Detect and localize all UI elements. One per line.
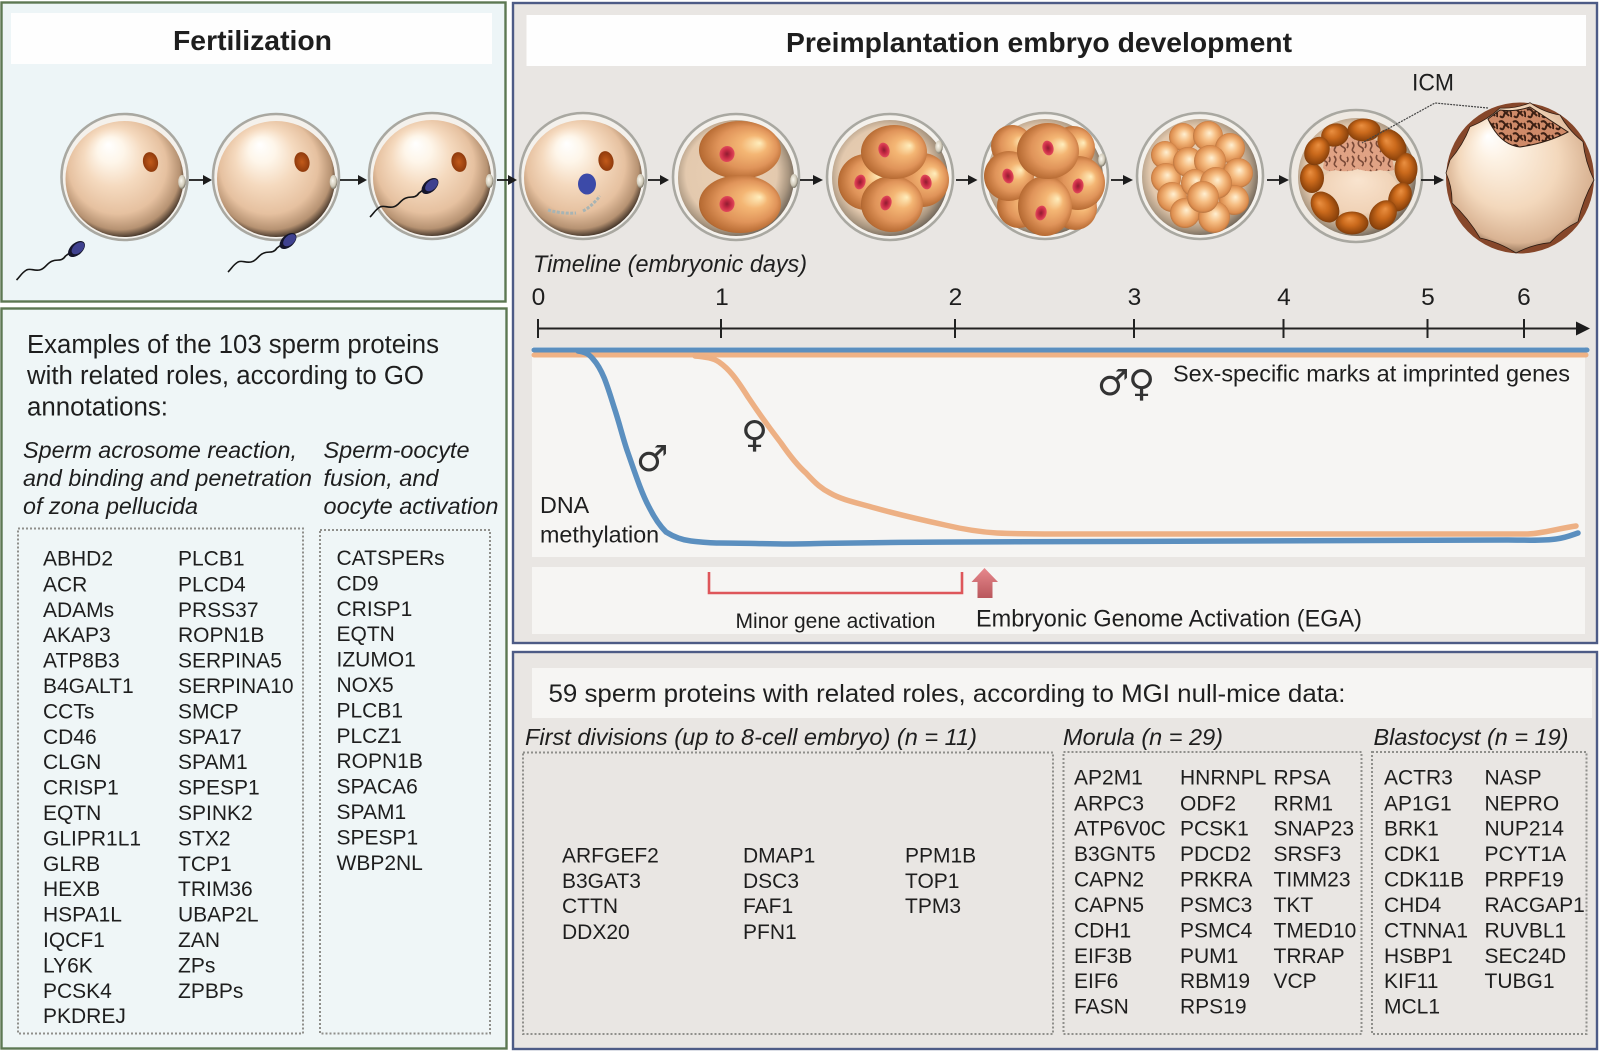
dotted box: morula genes [1064,752,1362,1034]
gene list: acrosome column 2: ROPN1B [178,624,264,647]
label: minor gene activation: Minor gene activation [736,610,936,633]
gene list: acrosome column 1: GLIPR1L1 [43,827,141,850]
gene list: acrosome column 2: TRIM36 [178,878,253,901]
gene list: blastocyst column 1: HSBP1 [1384,945,1453,968]
gene list: first divisions column 1: DDX20 [562,921,630,944]
gene list: morula column 2 [1180,767,1266,1018]
gene list: morula column 1: EIF6 [1074,970,1118,993]
gene list: morula column 1: FASN [1074,996,1129,1018]
heading: acrosome reaction column: Sperm acrosome reaction, [23,437,297,463]
gene list: blastocyst column 1: AP1G1 [1384,792,1452,815]
gene list: first divisions column 1: CTTN [562,895,618,918]
bracket: minor gene activation [709,572,962,593]
axis labels: 5 [1421,284,1435,311]
axis labels: 4 [1277,284,1291,311]
icon: 4-cell embryo [827,114,953,240]
arrow [189,175,212,185]
icon: egg with penetrating sperm [369,113,495,239]
gene list: acrosome column 1: HSPA1L [43,904,122,927]
timeline axis [532,284,1590,338]
gene list: first divisions column 2 [743,844,815,944]
gene list: blastocyst column 1: CHD4 [1384,894,1441,917]
label: DNA methylation: methylation [540,522,659,548]
gene list: morula column 1: ARPC3 [1074,792,1144,815]
gene list: acrosome column 2: SPINK2 [178,802,253,825]
heading: acrosome reaction column: of zona pellucida [23,493,198,519]
icon: 2-cell embryo [673,114,799,240]
gene list: morula column 2: RBM19 [1180,970,1250,993]
gene list: fusion: PLCB1 [336,699,403,722]
curve: paternal genome [578,351,1578,544]
heading: blastocyst: Blastocyst (n = 19) [1374,724,1568,750]
gene list: fusion: EQTN [336,623,395,646]
gene list: blastocyst column 2: NASP [1484,767,1542,790]
heading box: fertilization: Fertilization [173,25,332,56]
gene list: acrosome column 2: UBAP2L [178,904,259,927]
gene list: morula column 3: TIMM23 [1274,868,1351,892]
arrow [1267,175,1289,185]
icon: egg with sperm at zona [213,114,339,240]
gene list: morula column 3: RRM1 [1274,792,1333,815]
gene list: blastocyst column 2 [1484,767,1585,993]
gene list: morula column 2: PCSK1 [1180,818,1249,841]
icon: egg with approaching sperm [62,114,188,240]
gene list: first divisions column 2: DMAP1 [743,844,815,868]
label: DNA methylation [540,492,659,548]
gene list: morula column 3: SRSF3 [1274,843,1341,866]
gene list: fusion: SPESP1 [336,826,418,849]
gene list: first divisions column 3: TPM3 [905,895,961,918]
gene list: blastocyst column 2: TUBG1 [1484,970,1555,993]
gene list: first divisions column 2: FAF1 [743,895,793,918]
label: ICM: ICM [1412,70,1454,96]
gene list: acrosome column 1 [43,548,141,1028]
arrow [340,175,367,185]
gene list: fusion: CRISP1 [336,598,412,621]
symbol: female curve: ♀ [741,413,768,456]
gene list: fusion: SPAM1 [336,801,406,824]
gene list: blastocyst column 1: CDK1 [1384,843,1440,866]
gene list: acrosome column 1: CCTs [43,700,94,723]
gene list: acrosome column 2: PRSS37 [178,599,259,622]
heading: sperm-oocyte fusion column: oocyte activation [324,493,498,519]
label: ICM [1362,70,1488,143]
axis labels: 0 [532,284,545,311]
gene list: fusion [336,547,445,875]
gene list: acrosome column 1: ATP8B3 [43,650,120,672]
gene list: acrosome column 2: SERPINA10 [178,675,294,698]
gene list: acrosome column 1: ADAMs [43,599,114,622]
gene list: acrosome column 1: ABHD2 [43,548,113,571]
arrow [497,175,517,185]
gene list: acrosome column 1: B4GALT1 [43,675,134,698]
gene list: morula column 3: TMED10 [1274,919,1356,942]
gene list: morula column 2: RPS19 [1180,996,1247,1018]
panel: preimplantation embryo development [513,3,1597,643]
gene list: blastocyst column 1: CTNNA1 [1384,919,1468,942]
gene list: fusion: SPACA6 [336,776,418,799]
heading box: preimplantation [526,15,1586,66]
gene list: acrosome column 1: HEXB [43,878,100,901]
gene list: morula column 1: CAPN5 [1074,894,1144,917]
gene list: acrosome column 1: CD46 [43,726,97,749]
gene list: acrosome column 1: EQTN [43,802,101,825]
gene list: acrosome column 2: TCP1 [178,853,232,876]
gene list: acrosome column 1: PCSK4 [43,980,112,1003]
gene list: first divisions column 1: ARFGEF2 [562,844,659,868]
gene list: morula column 3: TRRAP [1274,945,1345,968]
gene list: acrosome column 1: CLGN [43,751,101,774]
axis labels: 2 [949,284,962,311]
chart background: methylation [532,347,1585,557]
gene list: fusion: WBP2NL [336,852,423,875]
gene list: first divisions column 3: PPM1B [905,844,976,868]
gene list: blastocyst column 1: CDK11B [1384,868,1464,892]
gene list: acrosome column 2: ZAN [178,929,220,952]
gene list: acrosome column 1: ACR [43,574,87,596]
chart: DNA methylation curves [534,350,1587,544]
symbol: male curve: ♂ [636,439,668,480]
panel: fertilization [2,2,506,302]
gene list: morula column 1: CAPN2 [1074,868,1144,892]
dotted box: acrosome genes [18,528,303,1034]
gene list: acrosome column 2: SPESP1 [178,777,260,800]
curve: imprinted maternal [534,352,1586,358]
gene list: acrosome column 2: STX2 [178,827,231,850]
gene list: acrosome column 1: LY6K [43,954,93,977]
gene list: acrosome column 2: ZPs [178,954,215,977]
gene list: blastocyst column 2: PCYT1A [1484,843,1566,866]
gene list: morula column 1: ATP6V0C [1074,818,1166,841]
arrow: EGA [972,568,998,598]
heading: sperm-oocyte fusion column [324,437,498,519]
gene list: acrosome column 2: SPA17 [178,726,242,749]
gene list: acrosome column 1: GLRB [43,853,100,876]
gene list: blastocyst column 2: RUVBL1 [1484,919,1566,942]
symbol: male imprinted: ♂ [1097,363,1129,404]
arrow [648,175,669,185]
heading: sperm-oocyte fusion column: Sperm-oocyte [324,437,470,463]
dotted box: blastocyst genes [1372,752,1586,1034]
gene list: first divisions column 2: DSC3 [743,870,799,893]
icon: early blastocyst [1290,110,1422,242]
heading: acrosome reaction column: and binding and penetration [23,465,312,491]
gene list: acrosome column 1: PKDREJ [43,1005,126,1028]
gene list: blastocyst column 2: PRPF19 [1484,868,1564,892]
heading box: fertilization [11,13,492,64]
heading box: MGI [532,668,1592,718]
gene list: fusion: PLCZ1 [336,725,402,748]
gene list: acrosome column 2: PLCB1 [178,548,245,571]
label: imprinted genes: Sex-specific marks at imprinted genes [1173,360,1570,386]
panel: sperm protein GO annotations [2,308,506,1048]
heading: morula: Morula (n = 29) [1063,724,1223,750]
panel: MGI null-mice data [513,652,1597,1049]
arrow [800,175,823,185]
gene list: morula column 1: EIF3B [1074,945,1132,968]
gene list: first divisions column 1 [562,844,659,944]
gene list: morula column 2: HNRNPL [1180,767,1266,790]
icon: blastocyst [1446,102,1594,254]
gene list: fusion: NOX5 [336,674,394,697]
arrow [1111,175,1133,185]
gene list: morula column 1 [1074,767,1166,1018]
gene list: morula column 2: PSMC4 [1180,919,1253,942]
heading: acrosome reaction column [23,437,312,519]
text block: GO intro [26,331,439,422]
gene list: morula column 2: PRKRA [1180,868,1252,892]
gene list: acrosome column 2: ZPBPs [178,980,243,1003]
gene list: blastocyst column 2: RACGAP1 [1484,894,1585,917]
gene list: blastocyst column 2: SEC24D [1484,945,1566,968]
gene list: morula column 2: ODF2 [1180,792,1236,815]
gene list: blastocyst column 2: NEPRO [1484,792,1559,815]
gene list: morula column 3 [1274,767,1356,993]
gene list: morula column 2: PSMC3 [1180,894,1252,917]
text block: GO intro: annotations: [27,394,168,422]
axis labels: 6 [1517,284,1531,311]
gene list: acrosome column 1: CRISP1 [43,777,119,800]
heading: timeline: Timeline (embryonic days) [533,251,807,278]
gene list: morula column 1: AP2M1 [1074,767,1143,790]
gene list: fusion: CATSPERs [336,547,445,570]
gene list: blastocyst column 1 [1384,767,1468,1018]
gene list: blastocyst column 1: KIF11 [1384,970,1438,993]
gene list: first divisions column 2: PFN1 [743,921,797,944]
gene list: acrosome column 1: AKAP3 [43,624,111,647]
icon: zygote with pronuclei [520,113,646,239]
heading: sperm-oocyte fusion column: fusion, and [324,465,440,491]
gene list: morula column 3: RPSA [1274,767,1331,790]
arrow [1421,175,1444,185]
gene list: morula column 1: B3GNT5 [1074,843,1156,866]
gene list: first divisions column 3: TOP1 [905,870,959,893]
icon: 8-cell embryo [982,113,1108,239]
heading box: preimplantation: Preimplantation embryo development [786,27,1292,58]
heading: first divisions: First divisions (up to 8-cell embryo) (n = 11) [525,724,977,750]
track background: gene activation [532,567,1585,634]
gene list: morula column 3: TKT [1274,894,1313,917]
gene list: morula column 3: SNAP23 [1274,818,1354,841]
gene list: acrosome column 1: IQCF1 [43,929,105,952]
curve: maternal genome [695,356,1576,534]
dotted box: first divisions genes [523,752,1053,1034]
gene list: blastocyst column 1: ACTR3 [1384,767,1453,790]
axis labels: 3 [1128,284,1141,311]
gene list: morula column 1: CDH1 [1074,919,1131,942]
gene list: morula column 2: PDCD2 [1180,843,1251,866]
icon: sperm 1 [16,238,88,280]
gene list: acrosome column 2 [178,548,294,1003]
gene list: acrosome column 2: PLCD4 [178,574,246,596]
curve: imprinted paternal [534,348,1587,352]
gene list: first divisions column 1: B3GAT3 [562,870,641,893]
icon: sperm 3 [370,175,441,217]
gene list: acrosome column 2: SPAM1 [178,751,248,774]
gene list: fusion: IZUMO1 [336,649,416,672]
icon: morula [1137,113,1263,239]
axis labels [532,284,1531,311]
gene list: blastocyst column 1: MCL1 [1384,996,1440,1018]
gene list: acrosome column 2: SERPINA5 [178,650,282,672]
gene list: fusion: ROPN1B [336,750,423,773]
symbol: female imprinted: ♀ [1128,362,1155,405]
label: EGA: Embryonic Genome Activation (EGA) [976,606,1362,632]
label: DNA methylation: DNA [540,492,590,518]
text block: GO intro: Examples of the 103 sperm proteins [27,331,439,359]
gene list: morula column 2: PUM1 [1180,945,1238,968]
gene list: morula column 3: VCP [1274,970,1317,993]
gene list: fusion: CD9 [336,572,379,595]
gene list: blastocyst column 1: BRK1 [1384,818,1439,841]
icon: sperm 2 [228,230,299,272]
text block: GO intro: with related roles, according to GO [26,362,424,390]
dotted box: fusion genes [320,530,490,1034]
gene list: first divisions column 3 [905,844,976,918]
gene list: acrosome column 2: SMCP [178,700,239,723]
arrow [956,175,978,185]
gene list: blastocyst column 2: NUP214 [1484,818,1564,841]
heading box: MGI: 59 sperm proteins with related roles, according to MGI null-mice data: [548,680,1346,708]
axis labels: 1 [715,284,729,311]
